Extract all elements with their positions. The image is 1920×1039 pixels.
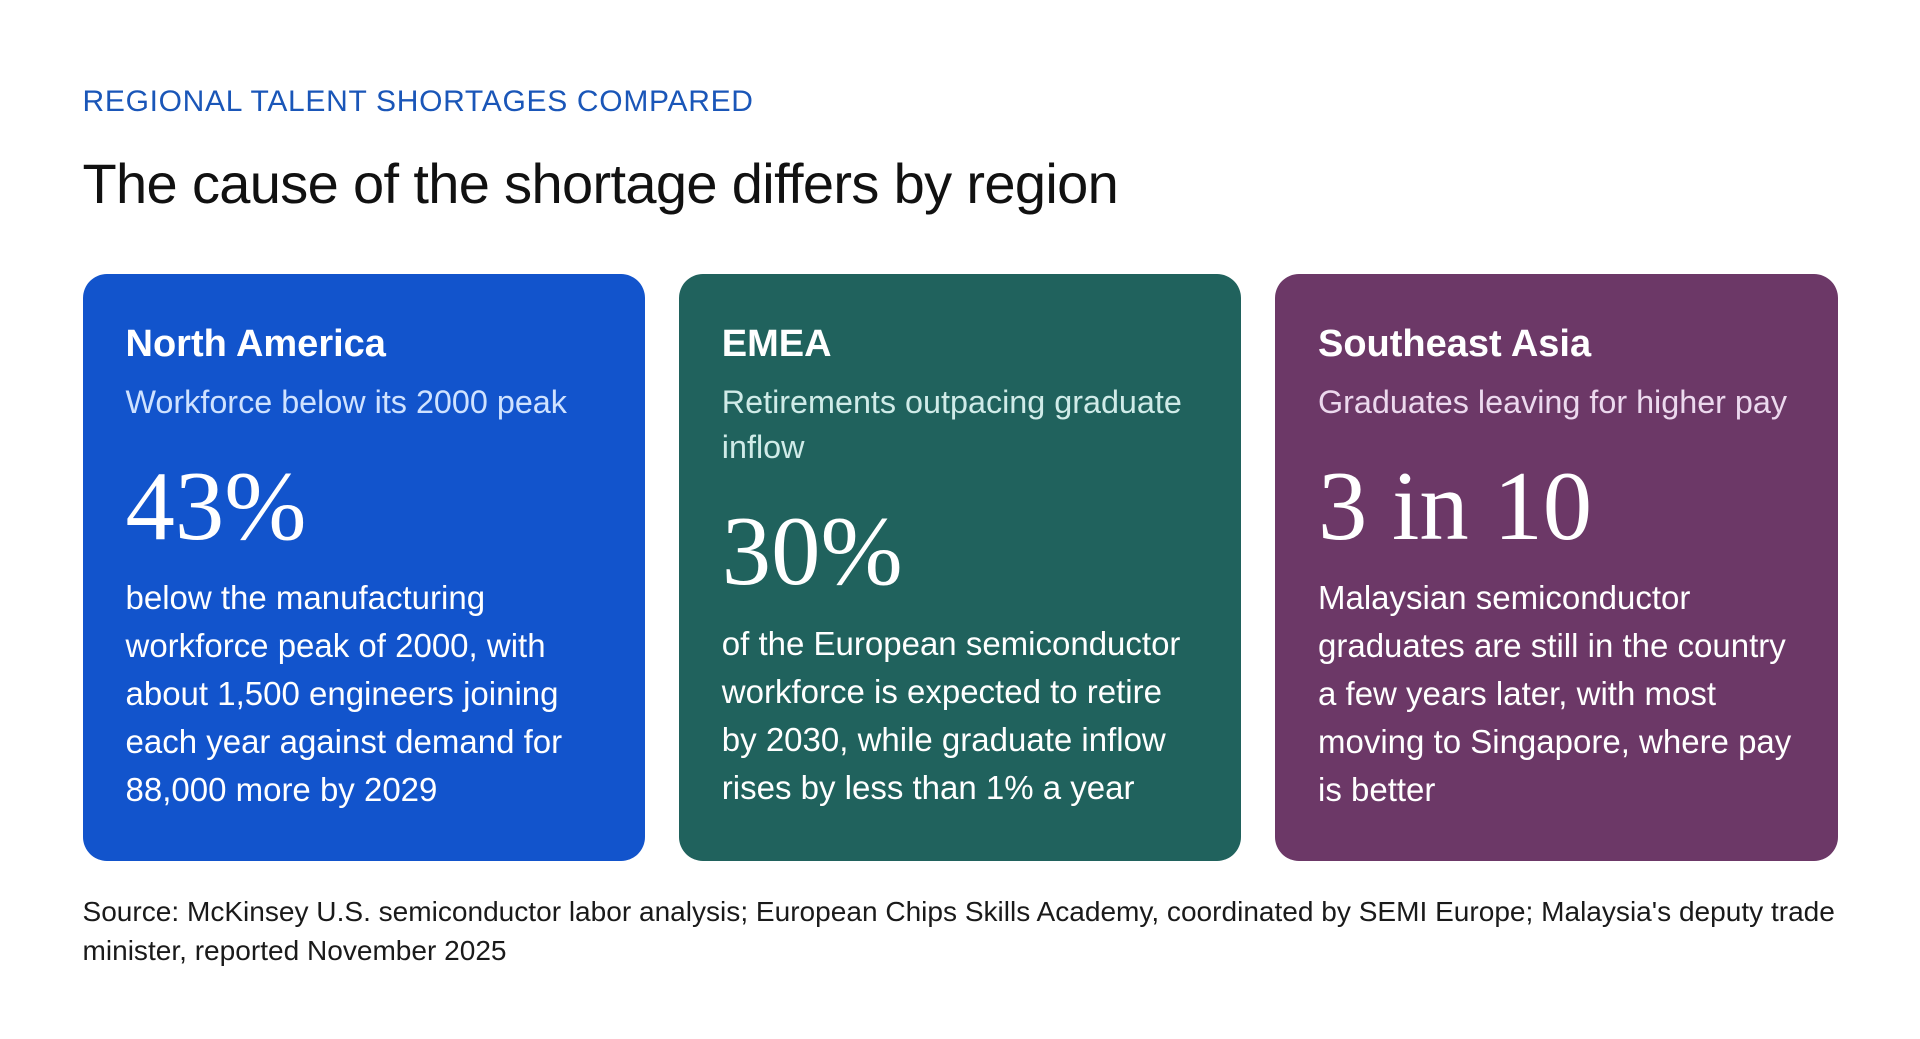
description: Southeast Asia bbox=[1318, 579, 1792, 808]
eyebrow heading: REGIONAL TALENT SHORTAGES COMPARED bbox=[82, 85, 754, 118]
source note: Source: McKinsey U.S. semiconductor labor analysis; European Chips Skills Academy, coordinated by SEMI Europe; Malaysia's deputy trade bbox=[82, 896, 1835, 927]
description: North America: about 1,500 engineers joining bbox=[126, 675, 559, 712]
source note bbox=[82, 896, 1835, 966]
statistic: 30%: 30% bbox=[722, 497, 903, 606]
cause: North America: Workforce below its 2000 peak bbox=[126, 384, 567, 420]
description: North America bbox=[126, 579, 562, 808]
cause: Southeast Asia: Graduates leaving for higher pay bbox=[1318, 384, 1787, 420]
description: EMEA: by 2030, while graduate inflow bbox=[722, 720, 1166, 758]
description: North America: 88,000 more by 2029 bbox=[126, 771, 437, 808]
cause: EMEA: Retirements outpacing graduate bbox=[722, 384, 1182, 420]
region name: North America: North America bbox=[126, 323, 386, 365]
source note: minister, reported November 2025 bbox=[82, 935, 507, 966]
description: North America: below the manufacturing bbox=[126, 579, 485, 616]
cause: EMEA bbox=[722, 384, 1182, 465]
description: North America: workforce peak of 2000, with bbox=[126, 627, 546, 664]
region name: Southeast Asia: Southeast Asia bbox=[1318, 323, 1591, 365]
statistic: 43%: 43% bbox=[126, 452, 306, 561]
description: EMEA bbox=[722, 624, 1180, 806]
description: Southeast Asia: moving to Singapore, where pay bbox=[1318, 723, 1791, 760]
statistic: 3 in 10: 3 in 10 bbox=[1318, 452, 1592, 561]
description: Southeast Asia: a few years later, with most bbox=[1318, 675, 1716, 712]
region name: EMEA: EMEA bbox=[722, 323, 832, 365]
description: North America: each year against demand for bbox=[126, 723, 562, 760]
cause: EMEA: inflow bbox=[722, 429, 804, 465]
description: Southeast Asia: graduates are still in the country bbox=[1318, 627, 1786, 664]
title: The cause of the shortage differs by region bbox=[82, 152, 1118, 215]
description: EMEA: of the European semiconductor bbox=[722, 624, 1180, 662]
panel: North America bbox=[82, 274, 645, 860]
description: Southeast Asia: Malaysian semiconductor bbox=[1318, 579, 1690, 616]
panel: EMEA bbox=[679, 274, 1241, 860]
description: EMEA: rises by less than 1% a year bbox=[722, 768, 1134, 806]
description: Southeast Asia: is better bbox=[1318, 771, 1435, 808]
panel: Southeast Asia bbox=[1275, 274, 1838, 860]
description: EMEA: workforce is expected to retire bbox=[722, 672, 1162, 710]
